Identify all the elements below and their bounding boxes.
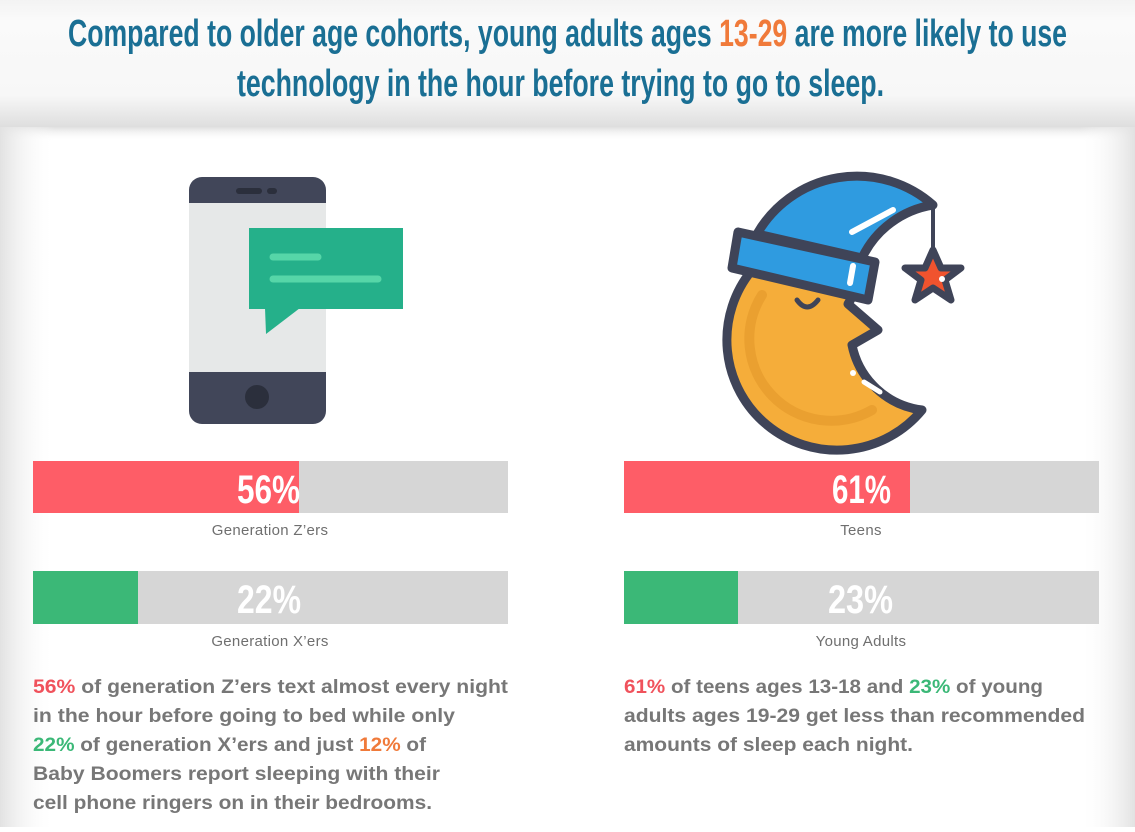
bar: Teens 61% (624, 461, 1099, 539)
text block: right description (624, 677, 1085, 756)
bar: Generation X'ers 22%: 22% (237, 578, 301, 622)
bar: Young Adults 23%: 23% (828, 578, 893, 622)
bar: Young Adults 23% (624, 571, 1099, 650)
text block: right description: amounts of sleep each night. (624, 735, 913, 756)
bar: Generation X'ers 22% (33, 571, 508, 650)
bar: Generation Z'ers 56% (33, 461, 508, 539)
icon: sleeping moon with nightcap (727, 176, 961, 450)
text block: left description (33, 677, 509, 814)
bar: Young Adults 23%: Young Adults (816, 633, 906, 650)
title: technology in the hour before trying to go to sleep. (237, 63, 884, 105)
title (68, 13, 1067, 105)
bar: Generation Z'ers 56%: 56% (237, 468, 300, 512)
text block: right description: 61% of teens ages 13-18 and 23% of young (624, 677, 1043, 698)
bar: Generation Z'ers 56%: Generation Z’ers (212, 522, 328, 539)
text block: right description: adults ages 19-29 get less than recommended (624, 706, 1085, 727)
bar: Teens 61%: Teens (840, 522, 882, 539)
text block: left description: 56% of generation Z’ers text almost every night (33, 677, 509, 698)
bar: Generation X'ers 22%: Generation X’ers (211, 633, 329, 650)
text block: left description: cell phone ringers on in their bedrooms. (33, 793, 432, 814)
icon: smartphone with chat bubble (189, 177, 403, 424)
text block: left description: 22% of generation X’ers and just 12% of (33, 735, 427, 756)
text block: left description: in the hour before going to bed while only (33, 706, 455, 727)
text block: left description: Baby Boomers report sleeping with their (33, 764, 441, 785)
bar: Teens 61%: 61% (832, 468, 891, 512)
